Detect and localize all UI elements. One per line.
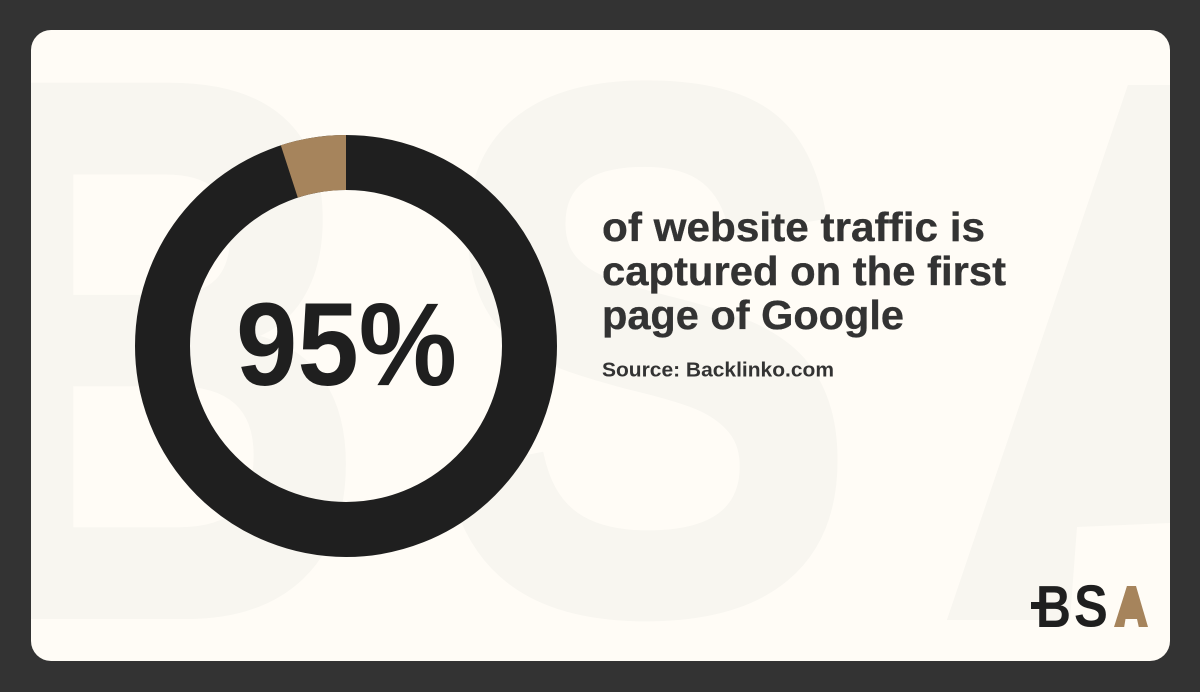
heading text <box>602 204 1006 338</box>
heading text: of website traffic is <box>602 204 985 250</box>
logo: BSA: A <box>1114 575 1148 640</box>
heading text: page of Google <box>602 292 904 338</box>
logo: BSA: S <box>1074 573 1108 639</box>
brown wedge: remaining 5 percent <box>281 135 346 198</box>
donut chart: 95 percent <box>162 135 530 529</box>
big number: 95% <box>236 279 457 411</box>
logo: BSA <box>1031 573 1148 640</box>
heading text: captured on the first <box>602 248 1006 294</box>
source line: Source: Backlinko.com <box>602 360 834 382</box>
logo: BSA: B <box>1036 575 1071 640</box>
